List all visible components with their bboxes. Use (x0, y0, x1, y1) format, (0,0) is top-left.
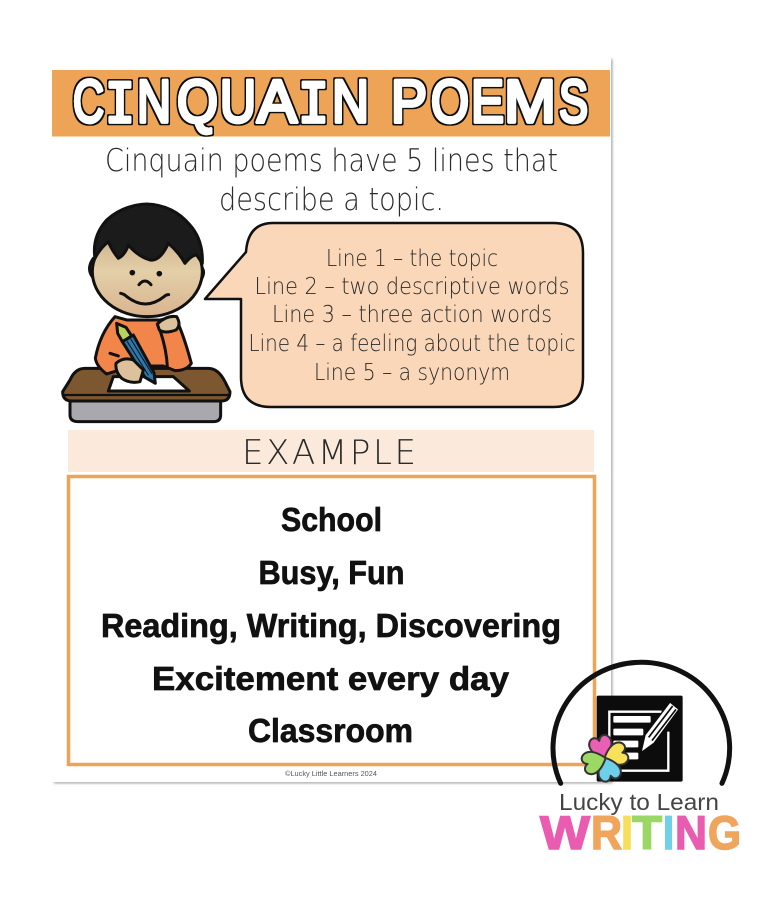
bubble text: Line 5 – a synonym (314, 360, 510, 386)
bubble text: Line 2 – two descriptive words (254, 274, 570, 300)
eyes (131, 271, 134, 274)
icon: four-heart clover (580, 733, 630, 783)
poem lines: Classroom (248, 712, 413, 749)
title banner: S (559, 68, 588, 135)
poster sheet (53, 58, 611, 782)
logo wordmark: T (632, 806, 662, 859)
bubble text: Line 1 – the topic (326, 246, 498, 272)
logo arch (553, 662, 730, 783)
title banner: M (504, 68, 556, 135)
ears (90, 258, 204, 283)
title banner: E (471, 68, 504, 135)
poem lines: Busy, Fun (258, 554, 404, 591)
example heading band: EXAMPLE (242, 433, 416, 473)
poem lines: Reading, Writing, Discovering (101, 607, 561, 644)
title banner: N (332, 68, 369, 135)
logo wordmark: G (708, 806, 741, 859)
intro text: describe a topic. (219, 182, 444, 218)
orange shirt (95, 317, 191, 374)
logo: Lucky to Learn Writing (540, 662, 741, 859)
writing hand (116, 359, 143, 382)
resting hand (157, 316, 179, 332)
title banner (52, 68, 610, 141)
example poem box (68, 476, 594, 764)
logo wordmark: I (621, 806, 633, 859)
example heading band (68, 430, 594, 473)
poem lines: Excitement every day (152, 660, 510, 697)
title banner: I (298, 73, 329, 141)
title banner: O (431, 68, 469, 135)
intro text: Cinquain poems have 5 lines that (105, 143, 558, 179)
title banner: I (105, 73, 135, 141)
bubble text: Line 3 – three action words (272, 302, 552, 328)
nose (139, 281, 151, 285)
hair (94, 204, 202, 263)
title banner: N (137, 68, 171, 135)
copyright: ©Lucky Little Learners 2024 (285, 770, 377, 778)
bubble text: Line 4 – a feeling about the topic (248, 331, 576, 357)
bubble text (248, 246, 576, 386)
logo tagline: Lucky to Learn (559, 789, 719, 815)
poem lines: School (281, 501, 382, 538)
speech bubble (205, 223, 583, 407)
title banner: U (220, 68, 256, 135)
logo wordmark: N (675, 806, 707, 859)
logo wordmark: W (540, 806, 591, 859)
arm crease (110, 330, 167, 367)
logo wordmark: R (591, 806, 622, 859)
face (92, 227, 202, 317)
smile (121, 293, 169, 304)
logo wordmark (540, 806, 741, 859)
pencil (117, 323, 155, 383)
logo wordmark: I (663, 806, 674, 859)
paper (108, 377, 189, 391)
title banner: A (257, 68, 297, 135)
illustration: boy writing at desk (63, 204, 230, 422)
title banner: P (391, 68, 427, 135)
title banner: Q (177, 68, 218, 135)
title banner: C (73, 68, 104, 135)
desk top (63, 368, 230, 401)
intro text (105, 143, 558, 218)
icon: notepad and pencil (597, 696, 683, 782)
desk legs/tray (70, 400, 221, 422)
poem lines (101, 501, 561, 749)
